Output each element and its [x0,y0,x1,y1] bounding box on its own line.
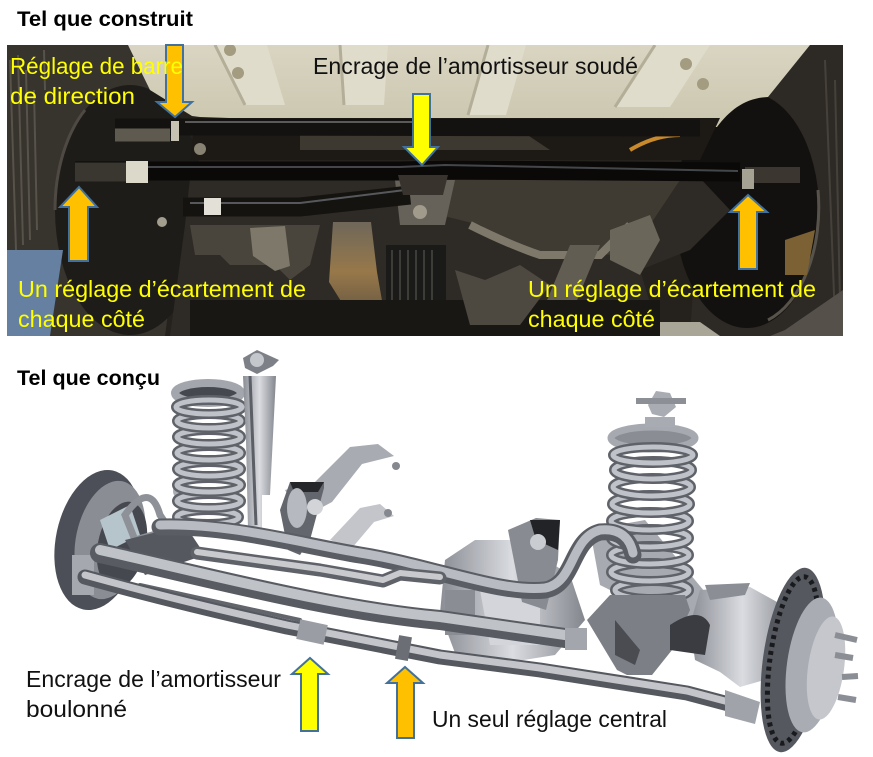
label: left toe adjustment [18,276,306,332]
label: single central adjustment: Un seul réglage central [432,706,667,732]
shock absorber [157,190,427,227]
right hub carrier [670,583,795,687]
label: steering adjustment [10,53,183,109]
heading: as built: Tel que construit [17,8,193,31]
arrow: right toe adjustment [730,195,767,269]
arrow: steering adjustment [157,45,192,117]
left brake disc [42,462,156,618]
label: welded shock anchor: Encrage de l’amortisseur soudé [313,53,638,79]
black tie bar [75,161,800,195]
label: right toe adjustment [528,276,816,332]
right bracket [508,518,720,635]
arrow: bolted shock anchor [292,658,328,731]
main tube [100,550,587,650]
arrow: welded shock anchor [404,94,438,165]
floor [660,322,720,336]
panel: suspension rendering [42,350,858,756]
cream skid plate [128,44,810,127]
arrow: single central adjustment [387,667,423,738]
blue jack block [7,250,63,336]
chassis and mud [170,118,730,336]
centre control arms [280,444,400,555]
label: right toe adjustment: Un réglage d’écartement de [528,276,816,302]
label: left toe adjustment: chaque côté [18,306,145,332]
upper steering bar [115,121,700,155]
arrow: left toe adjustment [60,187,97,261]
label: bolted shock anchor [26,666,281,722]
right tire and wheel well [675,45,843,336]
right brake disc and hub [750,564,858,756]
left shock absorber [243,350,279,530]
inner rod [197,552,440,581]
label: steering adjustment: de direction [10,83,135,109]
spring seat and strut base [587,595,690,675]
label: bolted shock anchor: boulonné [26,696,127,722]
label: steering adjustment: Réglage de barre [10,53,183,79]
left knuckle and link [125,482,205,575]
heading: as designed: Tel que conçu [17,367,160,390]
upper sway bar [160,525,633,591]
label: left toe adjustment: Un réglage d’écartement de [18,276,306,302]
differential [440,540,585,663]
lower tie rod [85,575,760,724]
thin rod [140,585,300,620]
label: right toe adjustment: chaque côté [528,306,655,332]
label: bolted shock anchor: Encrage de l’amortisseur [26,666,281,692]
left coil spring [175,383,242,524]
right coil spring [611,391,695,599]
panel: underside photo [7,44,843,336]
left tire [7,45,167,336]
